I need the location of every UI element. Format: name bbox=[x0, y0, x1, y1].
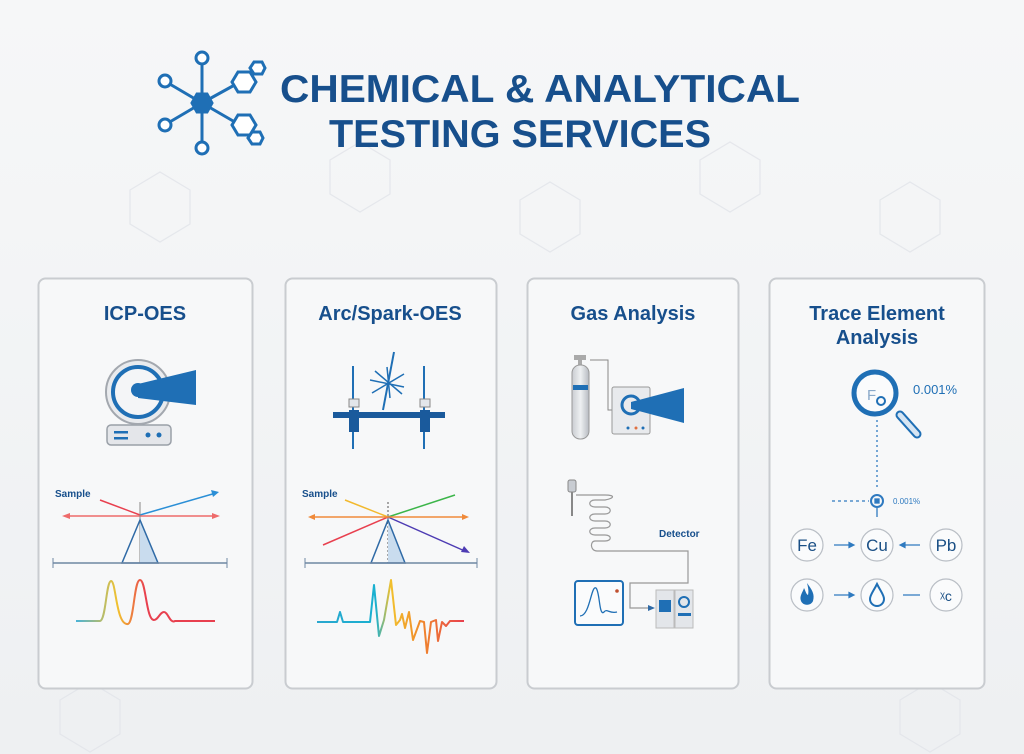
icon: magnifier: F bbox=[867, 387, 876, 404]
logo: molecule bbox=[159, 52, 265, 154]
chart: sample diagram: Sample bbox=[55, 489, 91, 500]
panel: Trace Element Analysis: Pb bbox=[936, 536, 956, 555]
icon: gas cylinder and analyzer bbox=[572, 355, 684, 439]
panel: ICP-OES bbox=[38, 278, 252, 688]
heading: Arc/Spark-OES: Arc/Spark-OES bbox=[318, 303, 462, 325]
icon: drop bbox=[870, 584, 884, 606]
icon: magnifier bbox=[854, 372, 958, 434]
icon: magnifier: 0.001% bbox=[913, 382, 958, 397]
heading: Gas Analysis: Gas Analysis bbox=[571, 303, 695, 325]
panel: Arc/Spark-OES bbox=[286, 278, 496, 688]
chart: spectrum bbox=[317, 580, 464, 653]
panel: Trace Element Analysis: Fe bbox=[797, 536, 817, 555]
chart: sample diagram: Sample bbox=[302, 489, 338, 500]
icon: GC column and detector bbox=[568, 480, 700, 628]
arrows bbox=[834, 542, 920, 598]
element circles bbox=[791, 529, 962, 611]
panel: Trace Element Analysis: Analysis bbox=[836, 327, 918, 349]
panel: Trace Element Analysis: ᵡc bbox=[940, 588, 952, 604]
connector bbox=[832, 420, 883, 517]
chart: sample diagram bbox=[53, 489, 227, 568]
chart: sample diagram bbox=[302, 489, 477, 568]
title: CHEMICAL & ANALYTICAL bbox=[280, 68, 800, 111]
title: TESTING SERVICES bbox=[329, 113, 711, 156]
heading: ICP-OES: ICP-OES bbox=[104, 303, 186, 325]
panel: Trace Element Analysis: Cu bbox=[866, 536, 888, 555]
panel: Gas Analysis bbox=[528, 278, 738, 688]
panel: Trace Element Analysis bbox=[770, 278, 984, 688]
icon: spark electrodes bbox=[333, 352, 445, 449]
panel: Trace Element Analysis: 0.001% bbox=[893, 497, 920, 506]
icon: flame bbox=[800, 583, 814, 605]
title bbox=[280, 68, 800, 156]
chart: spectrum bbox=[76, 580, 215, 624]
heading: Trace Element Analysis: Trace Element bbox=[809, 303, 945, 325]
icon: ICP torch bbox=[106, 360, 196, 445]
icon: GC column and detector: Detector bbox=[659, 529, 700, 540]
